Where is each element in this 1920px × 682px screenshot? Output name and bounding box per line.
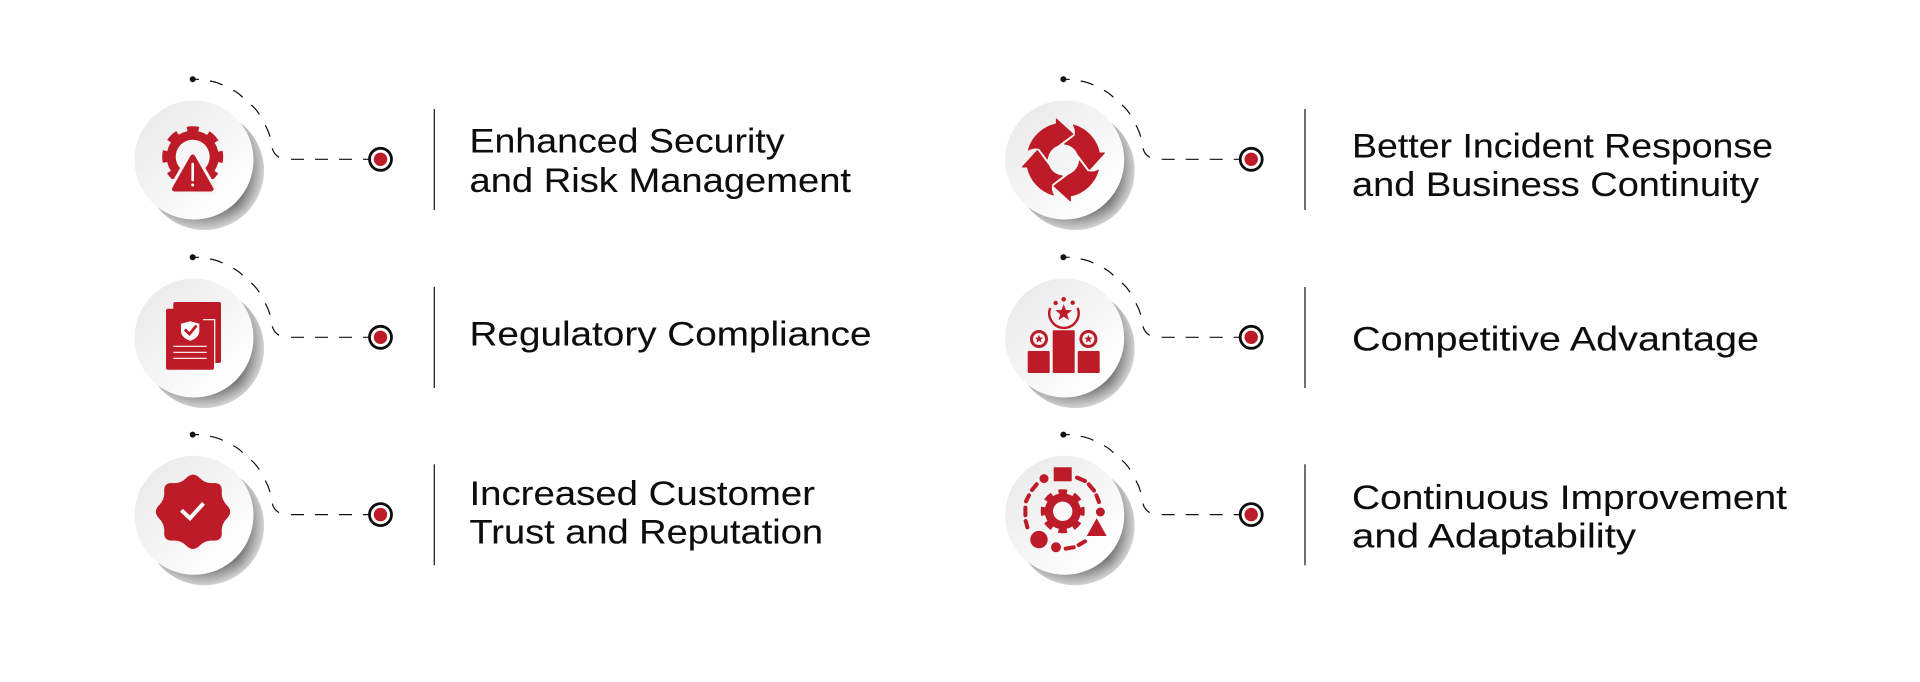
disc with shadow xyxy=(134,100,264,230)
marker: target dot xyxy=(370,504,392,526)
text: customer trust xyxy=(470,475,823,552)
icon: policy documents with shield xyxy=(166,302,221,370)
icon: podium with medals xyxy=(1028,297,1100,373)
marker: target dot xyxy=(370,148,392,170)
text: competitive advantage: Competitive Advantage xyxy=(1352,321,1759,359)
text: enhanced security: Enhanced Security xyxy=(470,122,784,160)
text: continuous improvement xyxy=(1352,479,1788,555)
text: continuous improvement: and Adaptability xyxy=(1352,517,1636,555)
connector: dashed curve xyxy=(190,432,370,515)
text: customer trust: Increased Customer xyxy=(470,475,815,513)
icon: verified badge xyxy=(156,475,230,549)
disc with shadow xyxy=(1005,456,1135,585)
icon: circular arrows xyxy=(1022,119,1104,201)
text: continuous improvement: Continuous Improvement xyxy=(1352,479,1788,517)
text: enhanced security: and Risk Management xyxy=(470,162,852,200)
marker: target dot xyxy=(1240,148,1262,170)
text: incident response xyxy=(1352,128,1773,204)
panel: competitive advantage xyxy=(1005,254,1759,408)
connector: dashed curve xyxy=(190,76,370,159)
connector: dashed curve xyxy=(1060,254,1241,337)
text: incident response: and Business Continuity xyxy=(1352,166,1759,204)
panel: enhanced security xyxy=(134,76,852,230)
disc with shadow xyxy=(1005,100,1135,230)
marker: target dot xyxy=(1240,504,1262,526)
panel: customer trust xyxy=(134,432,823,585)
connector: dashed curve xyxy=(1060,432,1241,515)
panel: continuous improvement xyxy=(1005,432,1788,585)
disc with shadow xyxy=(1005,278,1135,408)
icon: gear with orbiting shapes xyxy=(1025,467,1107,552)
text: regulatory compliance: Regulatory Compliance xyxy=(470,316,872,354)
panel: regulatory compliance xyxy=(134,254,872,408)
icon: gear with warning triangle xyxy=(165,129,220,189)
marker: target dot xyxy=(1240,326,1262,348)
disc with shadow xyxy=(134,278,264,408)
text: customer trust: Trust and Reputation xyxy=(470,514,823,552)
text: incident response: Better Incident Response xyxy=(1352,128,1773,166)
text: enhanced security xyxy=(470,122,852,200)
disc with shadow xyxy=(134,456,264,585)
panel: incident response xyxy=(1005,76,1773,230)
marker: target dot xyxy=(370,326,392,348)
connector: dashed curve xyxy=(1060,76,1241,159)
connector: dashed curve xyxy=(190,254,370,337)
